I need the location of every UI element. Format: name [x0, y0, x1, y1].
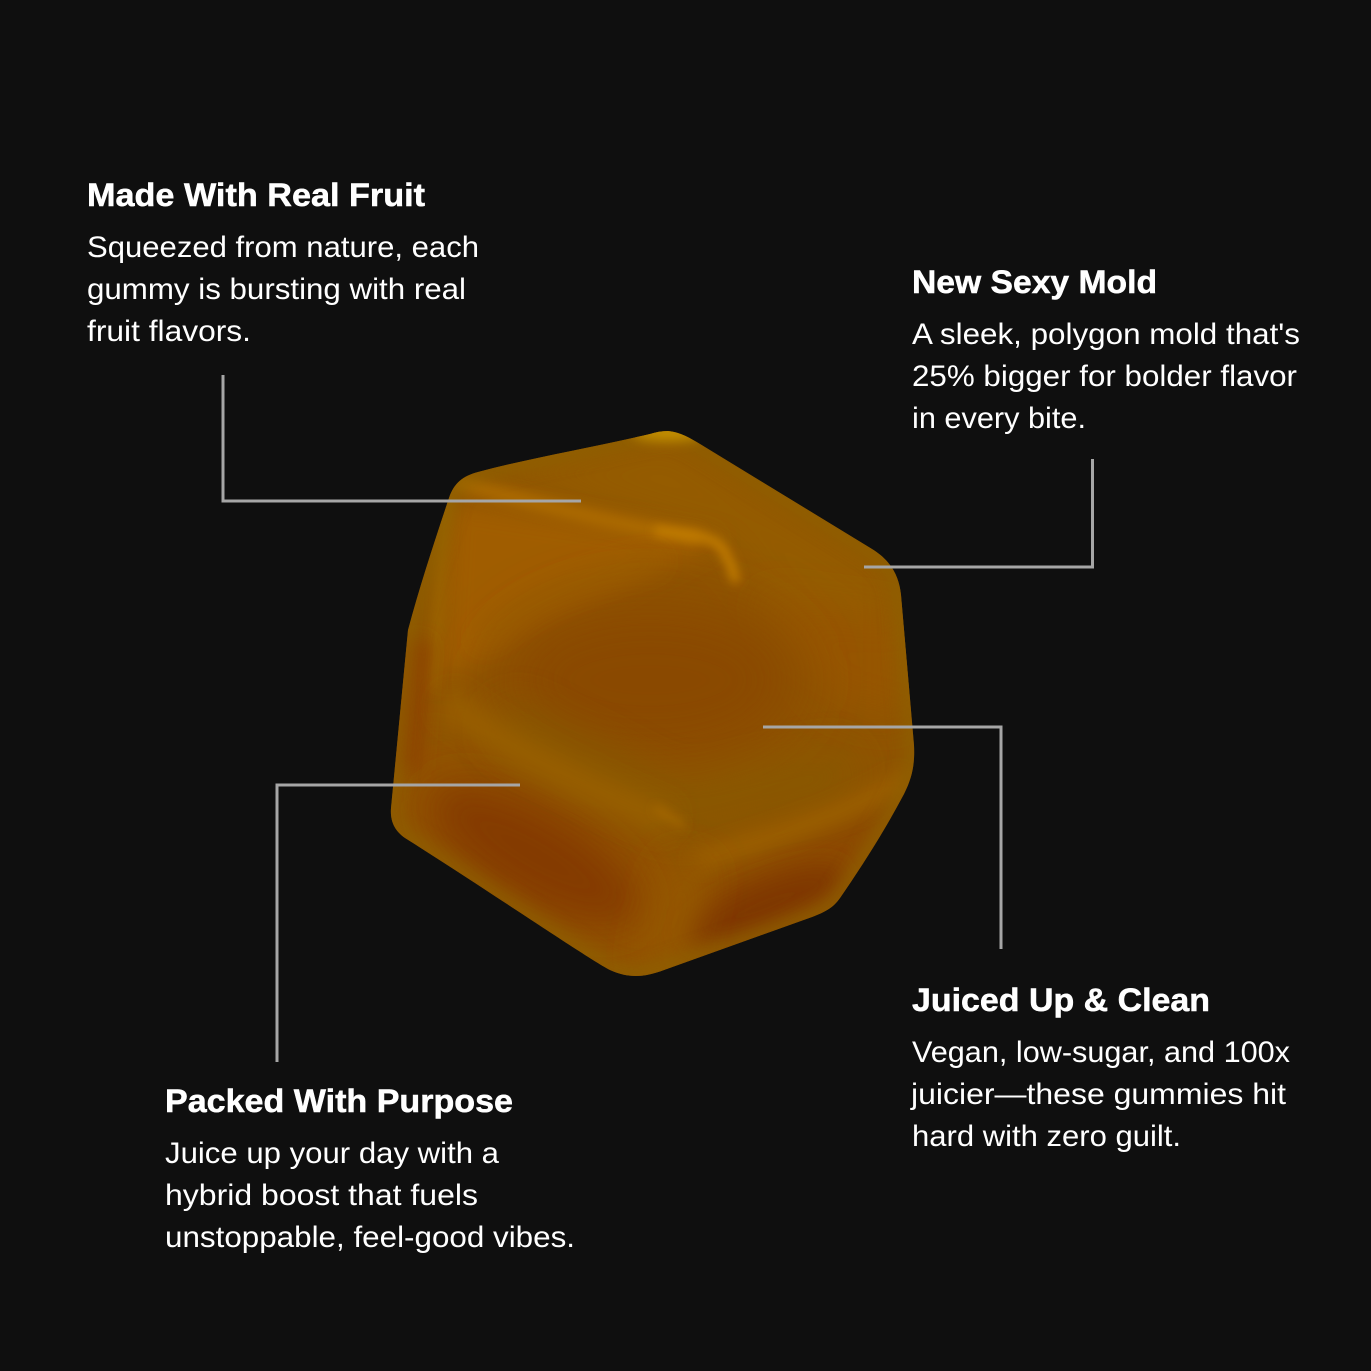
text block: new sexy mold: [912, 318, 1300, 435]
text block: packed with purpose: [165, 1137, 575, 1254]
text block: juiced up and clean: juicier—these gummies hit: [910, 1078, 1287, 1111]
text block: packed with purpose: hybrid boost that fuels: [165, 1179, 478, 1212]
connector line: new sexy mold: [864, 459, 1092, 567]
callout: packed with purpose: [165, 1083, 575, 1254]
connector line: made with real fruit: [223, 375, 581, 501]
text block: packed with purpose: unstoppable, feel-good vibes.: [165, 1221, 575, 1254]
heading: new sexy mold: New Sexy Mold: [912, 264, 1157, 300]
text block: packed with purpose: Juice up your day with a: [165, 1137, 499, 1170]
text block: juiced up and clean: hard with zero guilt.: [912, 1120, 1181, 1153]
text block: made with real fruit: Squeezed from nature, each: [87, 231, 479, 264]
text block: new sexy mold: in every bite.: [912, 402, 1086, 435]
callout: made with real fruit: [87, 177, 479, 348]
heading: made with real fruit: Made With Real Fruit: [87, 177, 425, 213]
callout: juiced up and clean: [910, 982, 1290, 1153]
text block: made with real fruit: [87, 231, 479, 348]
heading: juiced up and clean: Juiced Up & Clean: [912, 982, 1210, 1018]
text block: made with real fruit: gummy is bursting with real: [87, 273, 466, 306]
text block: new sexy mold: 25% bigger for bolder flavor: [912, 360, 1297, 393]
heading: packed with purpose: Packed With Purpose: [165, 1083, 513, 1119]
text block: new sexy mold: A sleek, polygon mold that's: [912, 318, 1300, 351]
callout: new sexy mold: [912, 264, 1300, 435]
text block: juiced up and clean: [910, 1036, 1290, 1153]
text block: juiced up and clean: Vegan, low-sugar, and 100x: [912, 1036, 1290, 1069]
connector line: juiced up and clean: [763, 727, 1001, 949]
text block: made with real fruit: fruit flavors.: [87, 315, 251, 348]
connector line: packed with purpose: [277, 785, 520, 1062]
gummy illustration: [380, 420, 930, 990]
